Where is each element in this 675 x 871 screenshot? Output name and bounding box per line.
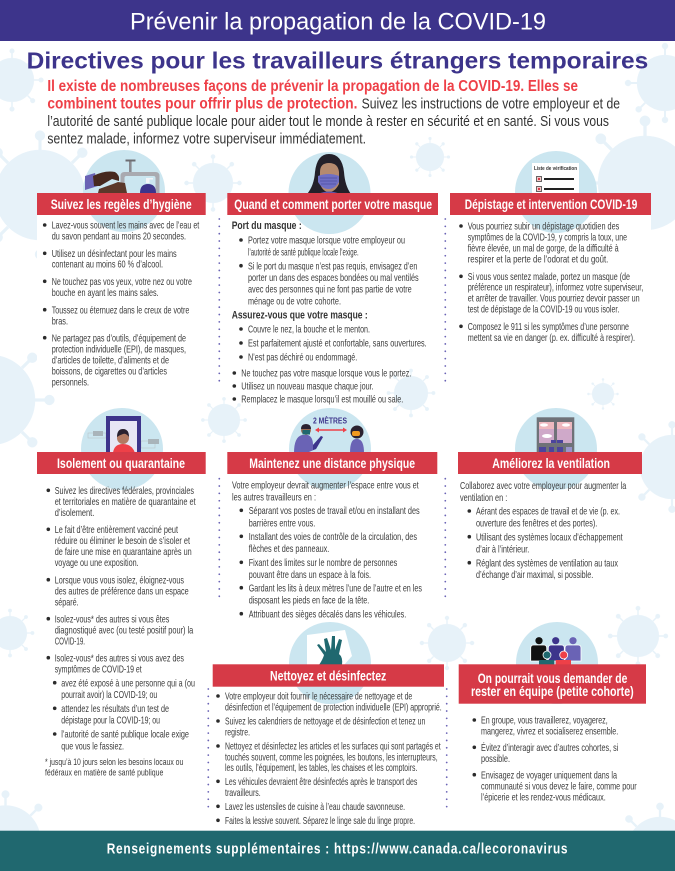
panel: mask — [227, 152, 438, 406]
text block: disposant les pieds en face de la tête. — [249, 595, 369, 607]
text block: possible. — [481, 753, 510, 765]
footnote — [45, 757, 183, 779]
text block: flèches et des panneaux. — [249, 543, 329, 555]
text block: Séparant vos postes de travail et/ou en installant des — [249, 505, 420, 517]
text block: Est parfaitement ajusté et confortable, sans ouvertures. — [248, 338, 427, 350]
text block: Si le port du masque n’est pas requis, envisagez d’en — [248, 260, 417, 272]
text block: Suivez les directives fédérales, provinciales — [55, 485, 194, 497]
text block: ventilation en : — [460, 492, 507, 504]
icon: checklist: Liste de vérification — [534, 166, 577, 172]
white card: screening — [450, 215, 651, 360]
text block: Portez votre masque lorsque votre employeur ou — [248, 235, 405, 247]
text block: Isolez-vous* des autres si vous êtes — [55, 613, 169, 625]
text block: Fixant des limites sur le nombre de personnes — [249, 557, 397, 569]
footer link text: Renseignements supplémentaires : https://www.canada.ca/lecoronavirus — [107, 840, 568, 857]
heading — [450, 193, 651, 215]
panel: physical distance — [227, 408, 437, 620]
icon: person in doorway — [81, 408, 163, 490]
text block: N’est pas déchiré ou endommagé. — [248, 352, 357, 364]
icon: group of people — [516, 622, 598, 704]
text block: pourrait avoir) la COVID-19; ou — [61, 689, 157, 701]
text block: avec des personnes qui ne font pas partie de votre — [248, 284, 412, 296]
heading: Quand et comment porter votre masque — [234, 197, 432, 212]
text block: l’autorité de santé publique locale l’exige. — [248, 246, 359, 258]
text block: Suivez les calendriers de nettoyage et de désinfection et tenez un — [225, 716, 425, 728]
icon: checklist — [515, 151, 597, 233]
text block: d’air à l’intérieur. — [476, 543, 529, 555]
text block: Lorsque vous vous isolez, éloignez-vous — [55, 574, 184, 586]
text block — [43, 220, 199, 388]
text block: Le fait d’être entièrement vacciné peut — [55, 524, 178, 536]
panel: cleaning — [213, 622, 444, 827]
panel: isolation — [37, 408, 206, 779]
icon: window — [515, 408, 597, 490]
text block: Toussez ou éternuez dans le creux de votre — [52, 304, 189, 316]
panel: hygiene — [37, 150, 206, 393]
text block — [232, 220, 427, 406]
text block: dépistage pour la COVID-19; ou — [61, 715, 160, 727]
footnote: fédéraux en matière de santé publique — [45, 768, 163, 779]
icon: hand washing — [83, 150, 165, 232]
text block: Gardant les lits à deux mètres l’une de l’autre et en les — [249, 582, 422, 594]
white card: hygiene — [37, 215, 206, 393]
heading: Isolement ou quarantaine — [57, 456, 185, 471]
text block: du savon pendant au moins 20 secondes. — [52, 231, 186, 243]
text block: Utilisez un désinfectant pour les mains — [52, 248, 177, 260]
text block: Remplacez le masque lorsqu’il est mouillé ou sale. — [241, 394, 403, 406]
text block — [459, 221, 643, 344]
text block: de faire une mise en quarantaine après un — [55, 546, 192, 558]
text block: En groupe, vous travaillerez, voyagerez, — [481, 715, 608, 727]
text block: diagnostiqué avec (ou testé positif pour) la — [55, 624, 193, 636]
text block: voyage ou une exposition. — [55, 557, 139, 569]
text block: porter un dans des espaces bondées ou mal ventilés — [248, 272, 419, 284]
text block: attendez les résultats d’un test de — [61, 703, 169, 715]
heading — [227, 193, 438, 215]
text block: Ne partagez pas d’outils, d’équipement de — [52, 332, 186, 344]
text block: COVID-19. — [55, 635, 85, 647]
text block: Utilisez un nouveau masque chaque jour. — [241, 381, 374, 393]
panel: ventilation — [458, 408, 642, 581]
main heading: Directives pour les travailleurs étrangers temporaires — [27, 48, 648, 74]
text block: ouverture des fenêtres et des portes). — [476, 518, 597, 530]
text block: bras. — [52, 315, 68, 327]
text block: les autres travailleurs en : — [232, 492, 316, 504]
footer banner — [0, 831, 675, 871]
dotted column dividers — [208, 219, 447, 808]
heading: Nettoyez et désinfectez — [270, 669, 386, 684]
text block: ménage ou de votre cohorte. — [248, 296, 341, 308]
panel: screening — [450, 151, 651, 360]
text block: Nettoyez et désinfectez les articles et les surfaces qui sont partagés et — [225, 741, 441, 753]
text block: Ne touchez pas vos yeux, votre nez ou votre — [52, 276, 192, 288]
heading — [37, 452, 206, 474]
text block: respirer et la perte de l’odorat et du goût. — [468, 254, 608, 266]
text block: d’articles de toilette, d’aliments et de — [52, 354, 169, 366]
intro text — [47, 78, 620, 148]
intro text: Il existe de nombreuses façons de prévenir la propagation de la COVID-19. Elles se — [47, 78, 578, 95]
text block: Couvre le nez, la bouche et le menton. — [248, 324, 370, 336]
icon: gloved hand with cloth — [289, 622, 371, 704]
heading — [227, 452, 437, 474]
text block — [232, 480, 422, 620]
text block — [216, 691, 442, 827]
heading: rester en équipe (petite cohorte) — [471, 684, 634, 699]
text block: travailleurs. — [225, 787, 261, 799]
text block: séparé. — [55, 596, 79, 608]
text block: Lavez-vous souvent les mains avec de l’eau et — [52, 220, 199, 232]
text block: Évitez d’interagir avec d’autres cohortes, si — [481, 741, 618, 754]
text block: bouche en ayant les mains sales. — [52, 287, 159, 299]
text block: Faites la lessive souvent. Séparez le linge sale du linge propre. — [225, 815, 415, 827]
text block — [472, 715, 637, 803]
intro text: combinent toutes pour offrir plus de protection. — [47, 96, 357, 112]
heading — [458, 452, 642, 474]
panel: cohort — [459, 622, 646, 803]
text block: barrières entre vous. — [249, 517, 315, 529]
text block: registre. — [225, 727, 250, 739]
text block: personnels. — [52, 376, 89, 388]
text block: touchés souvent, comme les poignées, les boutons, les interrupteurs, — [225, 751, 438, 763]
text block: Installant des voies de contrôle de la circulation, des — [249, 531, 417, 543]
text block — [45, 485, 196, 779]
text block: réduire ou éliminer le besoin de s’isoler et — [55, 535, 190, 547]
heading — [459, 664, 646, 704]
text block — [460, 480, 626, 581]
text block: les outils, l’équipement, les tables, les chaises et les comptoirs. — [225, 762, 417, 774]
heading: Maintenez une distance physique — [249, 456, 415, 471]
heading — [37, 193, 206, 215]
footnote: * jusqu’à 10 jours selon les besoins locaux ou — [45, 757, 183, 768]
text block: protection individuelle (EPI), de masques, — [52, 343, 186, 355]
text block: que vous le fassiez. — [61, 741, 124, 753]
text block: des autres de préférence dans un espace — [55, 585, 189, 597]
icon: two people two metres apart — [289, 408, 371, 490]
text block: pouvant être dans un espace à la fois. — [249, 569, 371, 581]
text block: et territoriales en matière de quarantaine et — [55, 496, 196, 508]
text block: Les véhicules devraient être désinfectés après le transport des — [225, 776, 417, 788]
heading — [213, 664, 444, 687]
icon: two people two metres apart: 2 MÈTRES — [313, 417, 348, 426]
text block: contenant au moins 60 % d’alcool. — [52, 259, 163, 271]
heading: Améliorez la ventilation — [492, 456, 610, 471]
heading: On pourrait vous demander de — [478, 671, 628, 686]
intro text: Suivez les instructions de votre employeur et de — [362, 96, 620, 112]
text block: d’échange d’air maximal, si possible. — [476, 569, 593, 581]
heading: Suivez les regèles d’hygiène — [51, 197, 192, 212]
top banner — [0, 0, 675, 41]
text block: boissons, de cigarettes ou d’articles — [52, 365, 167, 377]
banner title: Prévenir la propagation de la COVID-19 — [130, 8, 546, 36]
text block: Assurez-vous que votre masque : — [232, 309, 368, 321]
text block: l’épicerie et les rendez-vous médicaux. — [481, 791, 606, 803]
text block: Lavez les ustensiles de cuisine à l’eau chaude savonneuse. — [225, 801, 405, 813]
text block: Attribuant des sièges décalés dans les véhicules. — [249, 608, 406, 620]
text block: désinfection et l’équipement de protection individuelle (EPI) approprié. — [225, 701, 442, 713]
text block: Votre employeur devrait augmenter l’espace entre vous et — [232, 480, 419, 492]
text block: symptômes de COVID-19 et — [55, 663, 142, 675]
text block: l’autorité de santé publique locale exige — [61, 729, 189, 741]
text block: Votre employeur doit fournir le nécessaire de nettoyage et de — [225, 691, 412, 703]
text block: avez été exposé à une personne qui a (ou — [61, 677, 195, 689]
text block: Isolez-vous* des autres si vous avez des — [55, 652, 184, 664]
text block: d’isolement. — [55, 507, 94, 519]
text block: Envisagez de voyager uniquement dans la — [481, 769, 617, 781]
icon: woman wearing a mask — [288, 152, 370, 234]
text block: Port du masque : — [232, 220, 302, 232]
intro text: sentez malade, informez votre superviseur immédiatement. — [47, 132, 366, 148]
text block: Ne touchez pas votre masque lorsque vous le portez. — [241, 368, 411, 380]
